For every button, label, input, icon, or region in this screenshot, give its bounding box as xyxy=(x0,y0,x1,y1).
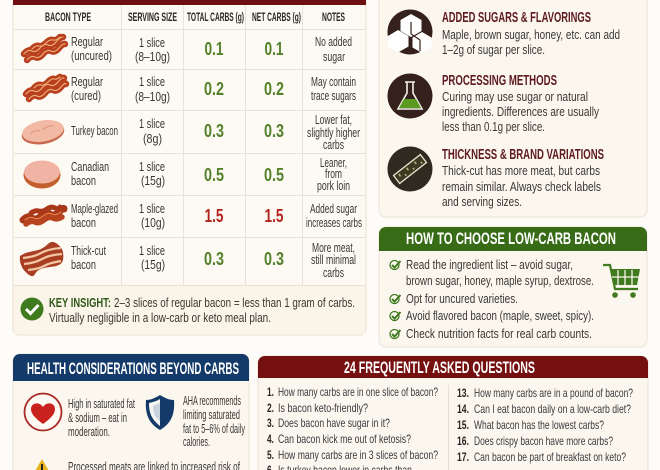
item: processing methods: ingredients. Differences are usually xyxy=(442,104,599,119)
row: thick-cut bacon: carbs xyxy=(323,266,344,280)
heading: HEALTH CONSIDERATIONS BEYOND CARBS xyxy=(27,359,239,378)
row: turkey bacon: 0.3 xyxy=(204,121,224,141)
item: processing methods: PROCESSING METHODS xyxy=(442,73,557,89)
row: thick-cut bacon: still minimal xyxy=(311,253,356,267)
checklist xyxy=(390,257,594,341)
row: canadian bacon xyxy=(24,156,350,193)
row: regular cured xyxy=(26,75,356,104)
row: regular uncured: Regular xyxy=(71,35,103,49)
question list right: 16. xyxy=(457,434,469,448)
text: AHA recommendation: calories. xyxy=(183,435,210,449)
question list right: 13. xyxy=(457,386,469,400)
row: turkey bacon: (8g) xyxy=(143,132,162,146)
text: AHA recommendation: AHA recommends xyxy=(183,394,241,408)
text: saturated fat: moderation. xyxy=(68,425,110,439)
panel: bacon carb table xyxy=(13,0,366,335)
table header row: BACON TYPE xyxy=(45,12,91,24)
row: regular uncured: No added xyxy=(315,35,352,49)
row: regular cured: Regular xyxy=(71,75,103,89)
row: maple-glazed bacon: Added sugar xyxy=(310,202,357,216)
item: processing methods xyxy=(388,73,599,134)
question list right xyxy=(457,386,633,464)
row: turkey bacon: 0.3 xyxy=(264,121,284,141)
row: regular uncured: 1 slice xyxy=(139,36,165,50)
row: maple-glazed bacon: increases carbs xyxy=(306,216,362,230)
icon: thick-cut bacon slab xyxy=(20,242,63,276)
row: regular cured: 0.2 xyxy=(204,79,224,99)
row: regular cured: (cured) xyxy=(71,89,101,103)
item: thickness and brand: and serving sizes. xyxy=(442,194,522,209)
checklist: Read the ingredient list – avoid sugar, xyxy=(406,257,573,272)
icon: turkey bacon slices xyxy=(20,117,66,148)
icon: green check xyxy=(20,298,44,320)
item: added sugars xyxy=(388,10,620,57)
question list left xyxy=(267,385,438,470)
row: canadian bacon: bacon xyxy=(71,174,96,188)
row: maple-glazed bacon xyxy=(23,202,362,230)
row: turkey bacon: Turkey bacon xyxy=(71,124,118,138)
row: regular uncured: sugar xyxy=(323,50,345,64)
row: thick-cut bacon: bacon xyxy=(71,258,96,272)
question list right: 15. xyxy=(457,418,469,432)
table header row: NOTES xyxy=(322,12,345,24)
row: regular uncured: 0.1 xyxy=(204,39,224,59)
table header row xyxy=(45,12,345,24)
icon: canadian bacon round xyxy=(24,160,60,188)
checklist: brown sugar, honey, maple syrup, dextrose. xyxy=(406,273,594,288)
question list left: Does bacon have sugar in it? xyxy=(278,416,390,430)
panel: health considerations xyxy=(13,354,249,470)
row: regular cured: May contain xyxy=(311,75,356,89)
icon: flask xyxy=(388,74,432,118)
panel: frequently asked questions xyxy=(258,356,648,470)
row: turkey bacon: slightly higher xyxy=(307,126,360,140)
callout: key insight: 2–3 slices of regular bacon = less than 1 gram of carbs. xyxy=(114,295,355,310)
row: maple-glazed bacon: 1.5 xyxy=(264,206,284,226)
row: canadian bacon: from xyxy=(325,167,342,181)
callout: key insight xyxy=(20,295,355,325)
row: thick-cut bacon: 0.3 xyxy=(264,249,284,269)
row: regular cured: (8–10g) xyxy=(135,90,170,104)
callout: key insight: Virtually negligible in a low-carb or keto meal plan. xyxy=(49,310,271,325)
question list left: 2. xyxy=(267,401,274,415)
row: canadian bacon: pork loin xyxy=(317,179,350,193)
icon: maple-glazed bacon strips xyxy=(23,207,64,224)
row: turkey bacon xyxy=(20,113,360,152)
question list left: Is bacon keto-friendly? xyxy=(278,401,368,415)
row: thick-cut bacon: (15g) xyxy=(141,258,165,272)
question list left: How many carbs are in one slice of bacon? xyxy=(278,385,438,399)
row: canadian bacon: Canadian xyxy=(71,160,109,174)
item: processing methods: Curing may use sugar or natural xyxy=(442,89,588,104)
row: canadian bacon: 0.5 xyxy=(204,165,224,185)
question list left: 4. xyxy=(267,432,274,446)
text: AHA recommendation xyxy=(183,394,245,449)
icon: shield xyxy=(146,395,174,430)
row: regular cured: trace sugars xyxy=(311,89,356,103)
row: turkey bacon: carbs xyxy=(323,138,344,152)
item: thickness and brand xyxy=(388,146,604,209)
icon: heart xyxy=(24,394,62,430)
row: thick-cut bacon xyxy=(20,241,356,280)
row: canadian bacon: 1 slice xyxy=(139,160,165,174)
row: thick-cut bacon: 1 slice xyxy=(139,244,165,258)
icon: cured bacon strips xyxy=(26,77,66,99)
row: turkey bacon: 1 slice xyxy=(139,117,165,131)
row: thick-cut bacon: Thick-cut xyxy=(71,244,106,258)
table header row: SERVING SIZE xyxy=(128,12,177,24)
checklist: Avoid flavored bacon (maple, sweet, spicy). xyxy=(406,308,594,323)
question list right: 14. xyxy=(457,402,469,416)
checklist: Check nutrition facts for real carb counts. xyxy=(406,326,592,341)
text: saturated fat xyxy=(68,397,135,439)
row: regular cured: 1 slice xyxy=(139,75,165,89)
row: maple-glazed bacon: 1.5 xyxy=(204,206,224,226)
row: thick-cut bacon: 0.3 xyxy=(204,249,224,269)
question list left: 3. xyxy=(267,416,274,430)
text: saturated fat: High in saturated fat xyxy=(68,397,135,411)
row: maple-glazed bacon: (10g) xyxy=(141,216,165,230)
question list left: 5. xyxy=(267,448,274,462)
icon: shopping cart xyxy=(603,265,640,298)
heading: 24 FREQUENTLY ASKED QUESTIONS xyxy=(344,358,535,377)
table header row: NET CARBS (g) xyxy=(252,12,301,24)
icon: warning triangle xyxy=(31,459,53,470)
text: AHA recommendation: fat to 5–6% of daily xyxy=(183,422,245,436)
question list right: 17. xyxy=(457,450,469,464)
row: regular uncured: (8–10g) xyxy=(135,50,170,64)
item: added sugars: 1–2g of sugar per slice. xyxy=(442,42,545,57)
row: maple-glazed bacon: Maple-glazed xyxy=(71,202,118,216)
text: saturated fat: & sodium – eat in xyxy=(68,411,127,425)
row: canadian bacon: 0.5 xyxy=(264,165,284,185)
row: thick-cut bacon: More meat, xyxy=(312,241,355,255)
row: regular cured: 0.2 xyxy=(264,79,284,99)
row: regular uncured: (uncured) xyxy=(71,49,112,63)
panel: how to choose low-carb bacon xyxy=(379,227,647,347)
row: turkey bacon: Lower fat, xyxy=(315,113,352,127)
icon: ruler xyxy=(388,146,432,192)
icon: uncured bacon strips xyxy=(24,37,65,60)
checklist: Opt for uncured varieties. xyxy=(406,291,518,306)
question list right: What bacon has the lowest carbs? xyxy=(474,418,604,432)
item: processing methods: less than 0.1g per slice. xyxy=(442,119,545,134)
row: maple-glazed bacon: bacon xyxy=(71,216,96,230)
icon: sugar cubes xyxy=(388,10,432,54)
callout: key insight: KEY INSIGHT: xyxy=(49,295,111,310)
item: thickness and brand: remain similar. Always check labels xyxy=(442,179,601,194)
table header row: TOTAL CARBS (g) xyxy=(187,12,244,24)
question list left: Can bacon kick me out of ketosis? xyxy=(278,432,411,446)
row: regular uncured: 0.1 xyxy=(264,39,284,59)
question list left: 1. xyxy=(267,385,274,399)
row: maple-glazed bacon: 1 slice xyxy=(139,202,165,216)
row: regular uncured xyxy=(24,35,352,64)
row: canadian bacon: Leaner, xyxy=(320,156,347,170)
item: thickness and brand: Thick-cut has more meat, but carbs xyxy=(442,163,600,178)
panel: what affects carbs xyxy=(379,0,647,217)
question list left: How many carbs are in 3 slices of bacon? xyxy=(278,448,438,462)
text: AHA recommendation: limiting saturated xyxy=(183,408,240,422)
row: canadian bacon: (15g) xyxy=(141,174,165,188)
